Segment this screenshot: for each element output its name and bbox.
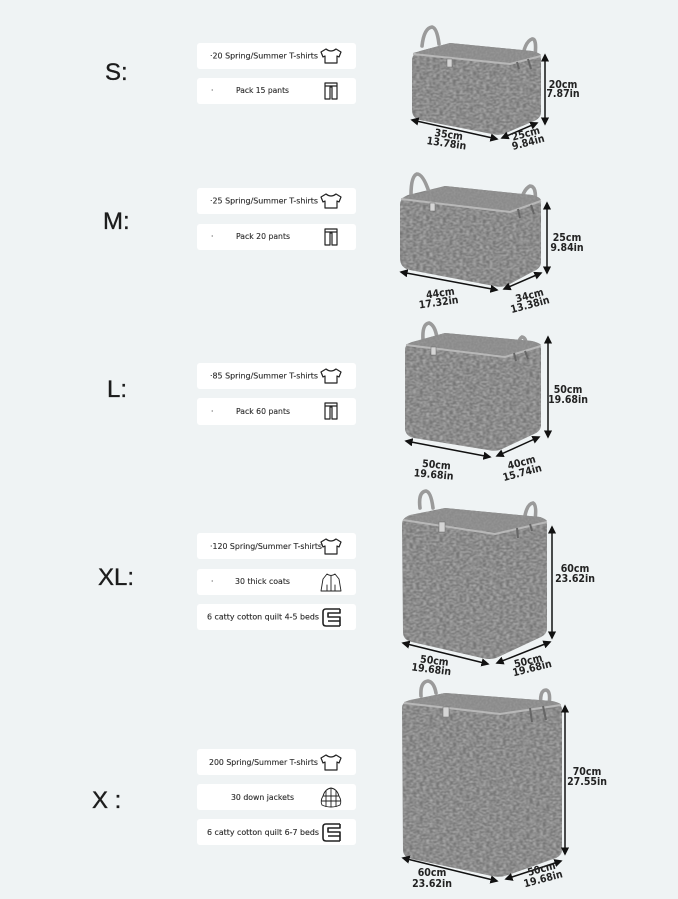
handles	[422, 27, 536, 62]
dimension: height: 7.87in	[546, 88, 580, 100]
dimension: width: 50cm	[419, 653, 449, 669]
card: thick coats: ·	[211, 577, 213, 586]
dimension: depth: 19.68in	[522, 868, 564, 890]
handles	[421, 681, 550, 708]
dimension: width: 44cm	[425, 286, 456, 301]
card: pants: ·	[211, 86, 213, 95]
card: thick coats	[197, 569, 356, 595]
handles	[411, 174, 535, 208]
card: pants: ·	[211, 407, 213, 416]
bag body	[400, 186, 541, 287]
handle strap	[518, 205, 534, 218]
card: pants	[197, 78, 356, 104]
card: pants: Pack 15 pants	[236, 86, 289, 95]
bag body	[402, 508, 547, 659]
card: T-shirts: ·85 Spring/Summer T-shirts	[210, 372, 318, 380]
bag body	[412, 43, 541, 135]
zipper	[431, 347, 436, 355]
panel: X capacity	[197, 749, 356, 845]
dimension arrows	[406, 441, 490, 457]
dimension: depth: 50cm	[513, 652, 544, 671]
dimension: width: 19.68in	[411, 661, 452, 678]
dimension: width: 50cm	[422, 458, 451, 472]
zipper	[443, 707, 449, 717]
dimension: width: 35cm	[434, 127, 464, 143]
dimension: depth: 9.84in	[511, 133, 546, 153]
card: thick coats: 30 thick coats	[235, 577, 290, 586]
dimension: depth: 34cm	[514, 286, 545, 305]
handles	[423, 323, 526, 356]
size label L: L:	[107, 376, 127, 403]
dimension: width: 17.32in	[418, 294, 459, 312]
bag body	[402, 693, 562, 877]
dimension: width	[417, 285, 459, 312]
dimension: height: 9.84in	[550, 242, 584, 254]
lid	[407, 333, 541, 356]
dimension: depth: 13.38in	[509, 294, 551, 316]
card: quilt: 6 catty cotton quilt 4-5 beds	[207, 612, 319, 622]
card: T-shirts: ·25 Spring/Summer T-shirts	[210, 196, 318, 206]
handle strap	[530, 706, 546, 722]
size label S: S:	[105, 59, 128, 86]
dimension: height	[548, 384, 588, 406]
dimension: width	[426, 126, 468, 153]
card: pants: Pack 60 pants	[236, 407, 290, 416]
dimension arrows	[412, 120, 497, 139]
dimension: depth: 19.68in	[511, 658, 553, 679]
dimension arrows	[401, 272, 497, 290]
dimension: width	[412, 867, 452, 890]
dimension: height: 19.68in	[548, 394, 588, 406]
dimension: width	[411, 653, 453, 678]
dimension arrows	[403, 858, 497, 881]
dimension: depth	[499, 452, 543, 484]
size label XL: XL:	[98, 564, 134, 591]
panel: S capacity	[197, 43, 356, 104]
card: T-shirts	[197, 43, 356, 69]
card: quilt	[197, 819, 356, 845]
card: T-shirts: ·20 Spring/Summer T-shirts	[210, 52, 318, 60]
bag S with dimensions	[412, 27, 580, 153]
lid	[413, 43, 541, 63]
dimension: depth	[507, 285, 551, 316]
dimension: height: 25cm	[553, 232, 581, 244]
dimension: height	[567, 766, 607, 788]
dimension: height: 60cm	[561, 563, 589, 575]
card: T-shirts	[197, 188, 356, 214]
panel: M capacity	[197, 188, 356, 250]
dimension: width: 13.78in	[426, 135, 467, 153]
zipper	[430, 203, 435, 211]
bag M with dimensions	[400, 174, 584, 316]
card: T-shirts: ·120 Spring/Summer T-shirts	[210, 542, 322, 551]
bag L with dimensions	[405, 323, 588, 484]
handle strap	[517, 59, 531, 69]
dimension: depth: 15.74in	[502, 462, 543, 484]
dimension: depth: 40cm	[506, 453, 537, 472]
handle strap	[514, 351, 528, 361]
dimension: height: 23.62in	[555, 573, 595, 585]
dimension: depth: 50cm	[526, 860, 557, 879]
card: pants	[197, 224, 356, 250]
card: T-shirts	[197, 749, 356, 775]
dimension: depth	[508, 124, 546, 153]
card: pants: Pack 20 pants	[236, 232, 290, 241]
dimension: height: 50cm	[554, 384, 582, 396]
dimension: height	[550, 232, 584, 254]
handle strap	[517, 524, 532, 538]
panel: L capacity	[197, 363, 356, 425]
lid	[404, 693, 561, 714]
card: T-shirts: 200 Spring/Summer T-shirts	[209, 758, 318, 767]
size label X: X :	[92, 787, 121, 814]
card: quilt: 6 catty cotton quilt 6-7 beds	[207, 828, 319, 837]
dimension: height	[555, 563, 595, 585]
card: down jackets: 30 down jackets	[231, 793, 294, 802]
dimension: depth	[520, 859, 564, 890]
size label M: M:	[103, 208, 130, 235]
card: pants: ·	[211, 232, 213, 241]
lid	[402, 186, 541, 211]
dimension: depth: 25cm	[511, 125, 541, 144]
lid	[404, 508, 547, 533]
zipper	[439, 522, 445, 532]
dimension: height	[546, 79, 580, 100]
dimension: width	[413, 457, 455, 483]
bag body	[405, 333, 541, 451]
card: T-shirts	[197, 533, 356, 559]
dimension arrows	[403, 643, 488, 664]
dimension: height: 27.55in	[567, 776, 607, 788]
zipper	[447, 59, 452, 67]
dimension: width: 60cm	[418, 867, 446, 879]
handles	[420, 491, 536, 522]
card: T-shirts	[197, 363, 356, 389]
dimension: height: 70cm	[573, 766, 601, 778]
card: down jackets	[197, 784, 356, 810]
panel: XL capacity	[197, 533, 356, 630]
card: pants	[197, 398, 356, 425]
card: quilt	[197, 604, 356, 630]
dimension: width: 23.62in	[412, 878, 452, 890]
dimension: height: 20cm	[549, 79, 577, 91]
bag XL with dimensions	[402, 491, 595, 679]
bag X with dimensions	[402, 681, 607, 890]
dimension: width: 19.68in	[413, 467, 454, 483]
